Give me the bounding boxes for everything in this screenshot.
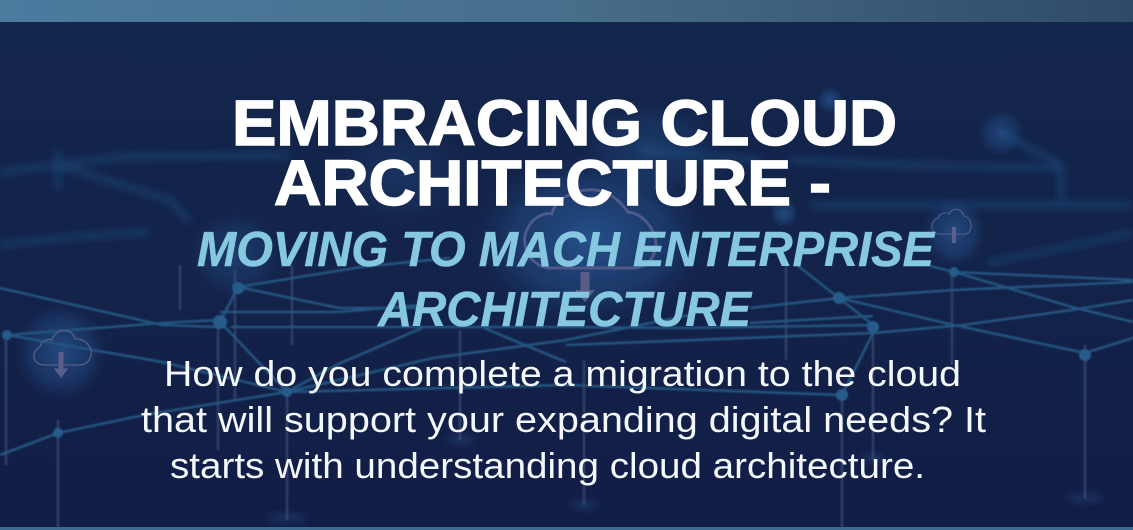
title: EMBRACING CLOUD bbox=[232, 87, 897, 159]
icon: cloud right bbox=[932, 209, 971, 243]
intro text: How do you complete a migration to the cloud bbox=[164, 353, 961, 394]
network nodes bbox=[2, 267, 1091, 438]
intro text: that will support your expanding digital needs? It bbox=[141, 399, 986, 440]
title: ARCHITECTURE - bbox=[274, 147, 831, 219]
blurred distant network bbox=[0, 133, 1133, 263]
title bbox=[232, 87, 897, 219]
intro text: starts with understanding cloud architecture. bbox=[170, 445, 925, 486]
pole base glows bbox=[267, 437, 1103, 521]
network lines bbox=[0, 258, 1133, 455]
subtitle: ARCHITECTURE bbox=[377, 283, 752, 337]
icon: cloud center bbox=[525, 190, 656, 302]
subtitle: MOVING TO MACH ENTERPRISE bbox=[197, 223, 935, 277]
top bar bbox=[0, 0, 1133, 22]
network poles bbox=[6, 265, 1085, 527]
subtitle bbox=[197, 223, 935, 337]
icon: cloud left bbox=[34, 330, 91, 377]
glow spots bbox=[14, 86, 1025, 402]
intro text bbox=[141, 353, 986, 486]
bottom bar bbox=[0, 527, 1133, 530]
